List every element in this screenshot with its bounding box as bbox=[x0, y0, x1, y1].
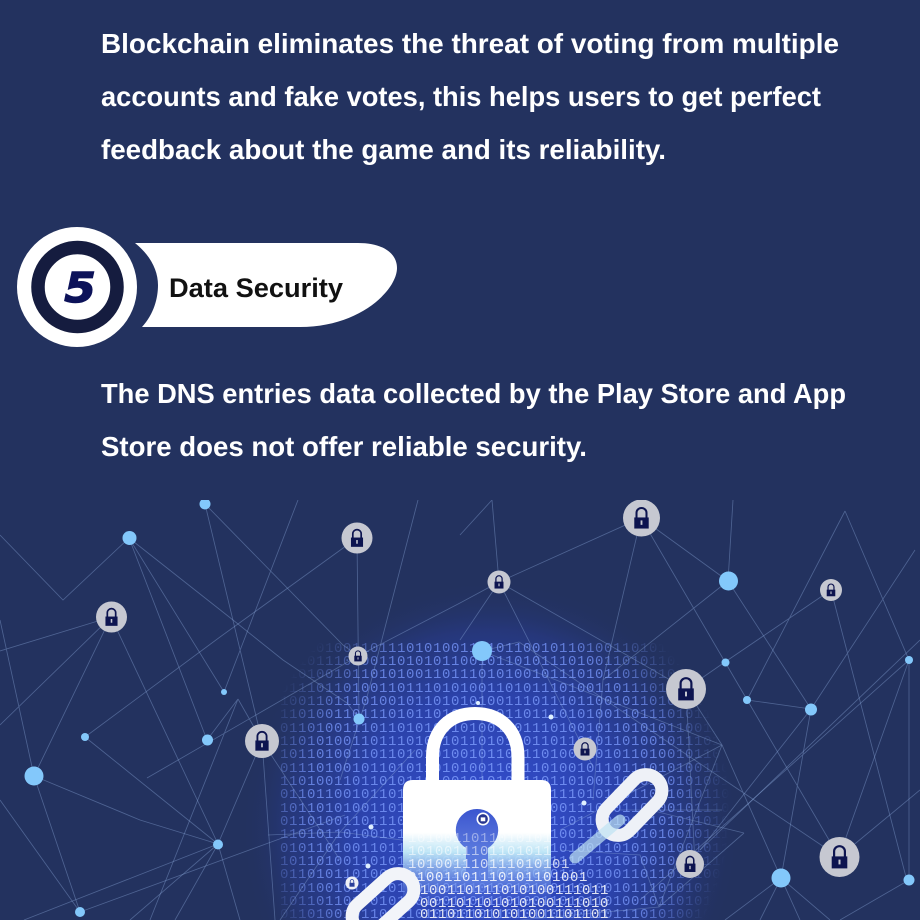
binary code matrix: 11010011011010110100101010111011010011010110101001 bbox=[280, 774, 730, 790]
blue nodes bbox=[24, 498, 914, 917]
lock node bbox=[488, 570, 510, 594]
chain link left bbox=[346, 867, 420, 920]
binary code matrix: 10110100110110101010010110111010011010110100101101 bbox=[280, 747, 730, 763]
binary code matrix: 11010011011101011010100101101110101001101110101101 bbox=[280, 707, 730, 723]
bright binary over padlock: 1010011101101011 bbox=[408, 844, 552, 860]
blue glow bbox=[268, 608, 712, 920]
bright binary over padlock: 01001101110101101001 bbox=[408, 870, 588, 886]
binary code matrix: 01110110100110111010100110101110100110111010110100 bbox=[280, 681, 730, 697]
data security paragraph bbox=[101, 378, 846, 462]
intro paragraph bbox=[101, 28, 839, 165]
keyhole lock node bbox=[476, 812, 490, 826]
binary code matrix: 10110101001101011101001011010100111010110100101110 bbox=[280, 801, 730, 817]
lock node bbox=[342, 522, 372, 554]
padlock bbox=[403, 714, 551, 905]
binary code matrix: 10110110100101101001101110100110101101001011010101 bbox=[280, 894, 730, 910]
intro paragraph: accounts and fake votes, this helps users to get perfect bbox=[101, 81, 821, 112]
lock nodes bbox=[96, 500, 860, 890]
illustration: network and padlock bbox=[0, 498, 920, 920]
binary code matrix: 01011010011011101010010110111010100110101101001011 bbox=[280, 841, 730, 857]
chain link inner fragment bbox=[575, 820, 620, 858]
lock node bbox=[245, 724, 279, 758]
binary code matrix: 01101011010010110111010100110101110100110110101001 bbox=[280, 867, 730, 883]
network lines bbox=[0, 500, 920, 920]
padlock body bbox=[403, 780, 551, 905]
binary code matrix: 11010010110101001101110100101101101001011101010110 bbox=[280, 881, 730, 897]
binary code matrix: 01101110100110101011001011010111010011010110101101 bbox=[280, 654, 730, 670]
number badge bbox=[17, 227, 137, 347]
bright binary over padlock: 1010011011010101 bbox=[408, 831, 552, 847]
binary code matrix: 10110100110101110100101101010011101101010010110110 bbox=[280, 854, 730, 870]
bright binary over padlock: 100110111010100111011 bbox=[420, 883, 609, 899]
binary code matrix: 11010010110101001101110101001011101011010010110101 bbox=[280, 667, 730, 683]
sparkles bbox=[366, 701, 586, 868]
lock node bbox=[820, 837, 860, 877]
number badge: 5 bbox=[64, 265, 96, 312]
keyhole bbox=[456, 809, 498, 886]
lock node bbox=[666, 669, 706, 709]
data security paragraph: Store does not offer reliable security. bbox=[101, 431, 587, 462]
bright binary over padlock: 101001110111010101 bbox=[408, 857, 570, 873]
section header: 5 Data Security bbox=[17, 227, 397, 347]
lock node bbox=[676, 850, 704, 878]
lock node bbox=[623, 500, 660, 536]
intro paragraph: feedback about the game and its reliability. bbox=[101, 134, 666, 165]
small white lock node bbox=[346, 876, 358, 890]
binary code matrix: 01101001101110100110101101001011011101001101011010 bbox=[280, 814, 730, 830]
lock node bbox=[96, 602, 127, 632]
header banner bbox=[135, 243, 397, 327]
binary code matrix: 01110100101101011010100110111010010110111010100110 bbox=[280, 761, 730, 777]
lock node bbox=[348, 646, 368, 666]
binary code matrix: 10110100110111010100110101100101101001101011010011 bbox=[280, 641, 730, 657]
lock node bbox=[574, 738, 596, 760]
binary code matrix: 10011011101001011010101001110111011001011010011011 bbox=[280, 694, 730, 710]
data security paragraph: The DNS entries data collected by the Play Store and App bbox=[101, 378, 846, 409]
binary code matrix: 01101001110110101001010011011101001011010101100111 bbox=[280, 721, 730, 737]
binary code matrix: 11010110100101101010011101011010011011101010010111 bbox=[280, 827, 730, 843]
lock node bbox=[820, 579, 842, 601]
chain link right bbox=[595, 768, 669, 842]
bright binary over padlock: 001101101010100111010 bbox=[420, 896, 609, 912]
header title: Data Security bbox=[169, 273, 343, 303]
binary code matrix: 11010100110111010010110101001101101011010010111010 bbox=[280, 734, 730, 750]
binary code matrix bbox=[280, 641, 730, 920]
intro paragraph: Blockchain eliminates the threat of voting from multiple bbox=[101, 28, 839, 59]
bright binary over padlock bbox=[408, 831, 609, 920]
binary code matrix: 01101100101101101001101010011011101010011011010110 bbox=[280, 787, 730, 803]
padlock shackle bbox=[432, 714, 518, 782]
